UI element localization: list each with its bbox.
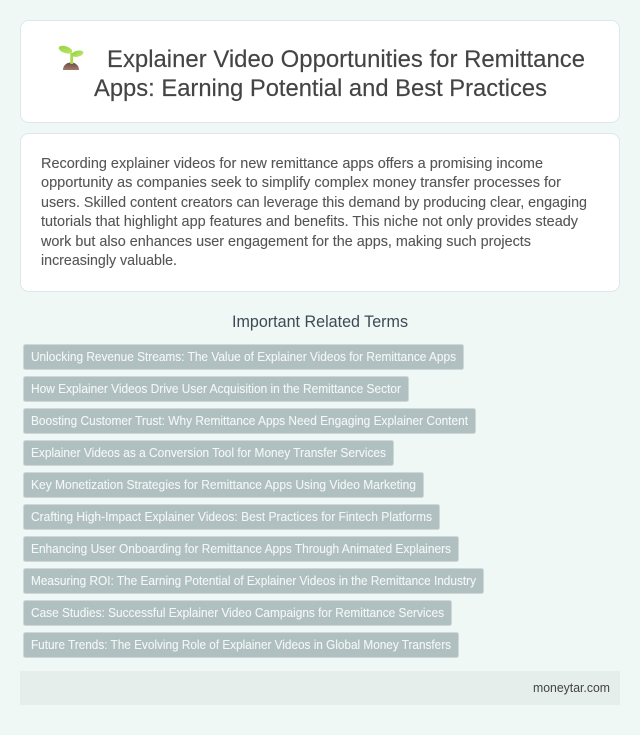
- chip 2: [24, 376, 408, 402]
- chip 4: [24, 440, 394, 466]
- chip 10: Future Trends: The Evolving Role of Explainer Videos in Global Money Transfers: [31, 637, 451, 652]
- footer bar: [20, 671, 620, 705]
- panel: intro paragraph: work but also enhances user engagement for the apps, making such projects: [40, 233, 531, 250]
- panel: intro paragraph: Recording explainer videos for new remittance apps offers a promising income: [41, 155, 543, 172]
- chip 1: Unlocking Revenue Streams: The Value of Explainer Videos for Remittance Apps: [31, 349, 456, 364]
- chip 8: Measuring ROI: The Earning Potential of Explainer Videos in the Remittance Industry: [31, 573, 476, 588]
- chip 2: How Explainer Videos Drive User Acquisition in the Remittance Sector: [31, 381, 402, 396]
- chip 3: [24, 408, 476, 434]
- chip 7: Enhancing User Onboarding for Remittance Apps Through Animated Explainers: [31, 541, 451, 556]
- heading: related terms: Important Related Terms: [232, 313, 408, 331]
- title text: [94, 46, 585, 102]
- chip 3: Boosting Customer Trust: Why Remittance Apps Need Engaging Explainer Content: [31, 413, 468, 428]
- list of related term chips: [24, 344, 484, 658]
- chip 6: Crafting High-Impact Explainer Videos: Best Practices for Fintech Platforms: [31, 509, 432, 524]
- panel: intro paragraph: tutorials that highlight app features and benefits. This niche not only provides steady: [41, 213, 578, 230]
- chip 8: [24, 568, 484, 594]
- chip 5: [24, 472, 424, 498]
- chip 5: Key Monetization Strategies for Remittance Apps Using Video Marketing: [31, 477, 416, 492]
- chip 6: [24, 504, 440, 530]
- chip 9: [24, 600, 452, 626]
- icon: sprout: [58, 44, 84, 70]
- panel: intro paragraph: increasingly valuable.: [41, 252, 177, 269]
- chip 9: Case Studies: Successful Explainer Video Campaigns for Remittance Services: [31, 605, 444, 620]
- chip 7: [24, 536, 458, 562]
- title text: Apps: Earning Potential and Best Practices: [94, 75, 547, 102]
- title text: Explainer Video Opportunities for Remittance: [107, 46, 585, 73]
- panel: intro paragraph: users. Skilled content creators can leverage this demand by producing clear, engaging: [41, 194, 587, 211]
- footer bar: moneytar.com: [533, 681, 610, 695]
- panel: intro paragraph: opportunity as companies seek to simplify complex money transfer processes for: [41, 174, 561, 191]
- panel: title card: [20, 20, 620, 122]
- panel: intro paragraph: [20, 134, 620, 292]
- chip 10: [24, 632, 458, 658]
- chip 1: [24, 344, 464, 370]
- chip 4: Explainer Videos as a Conversion Tool for Money Transfer Services: [31, 445, 386, 460]
